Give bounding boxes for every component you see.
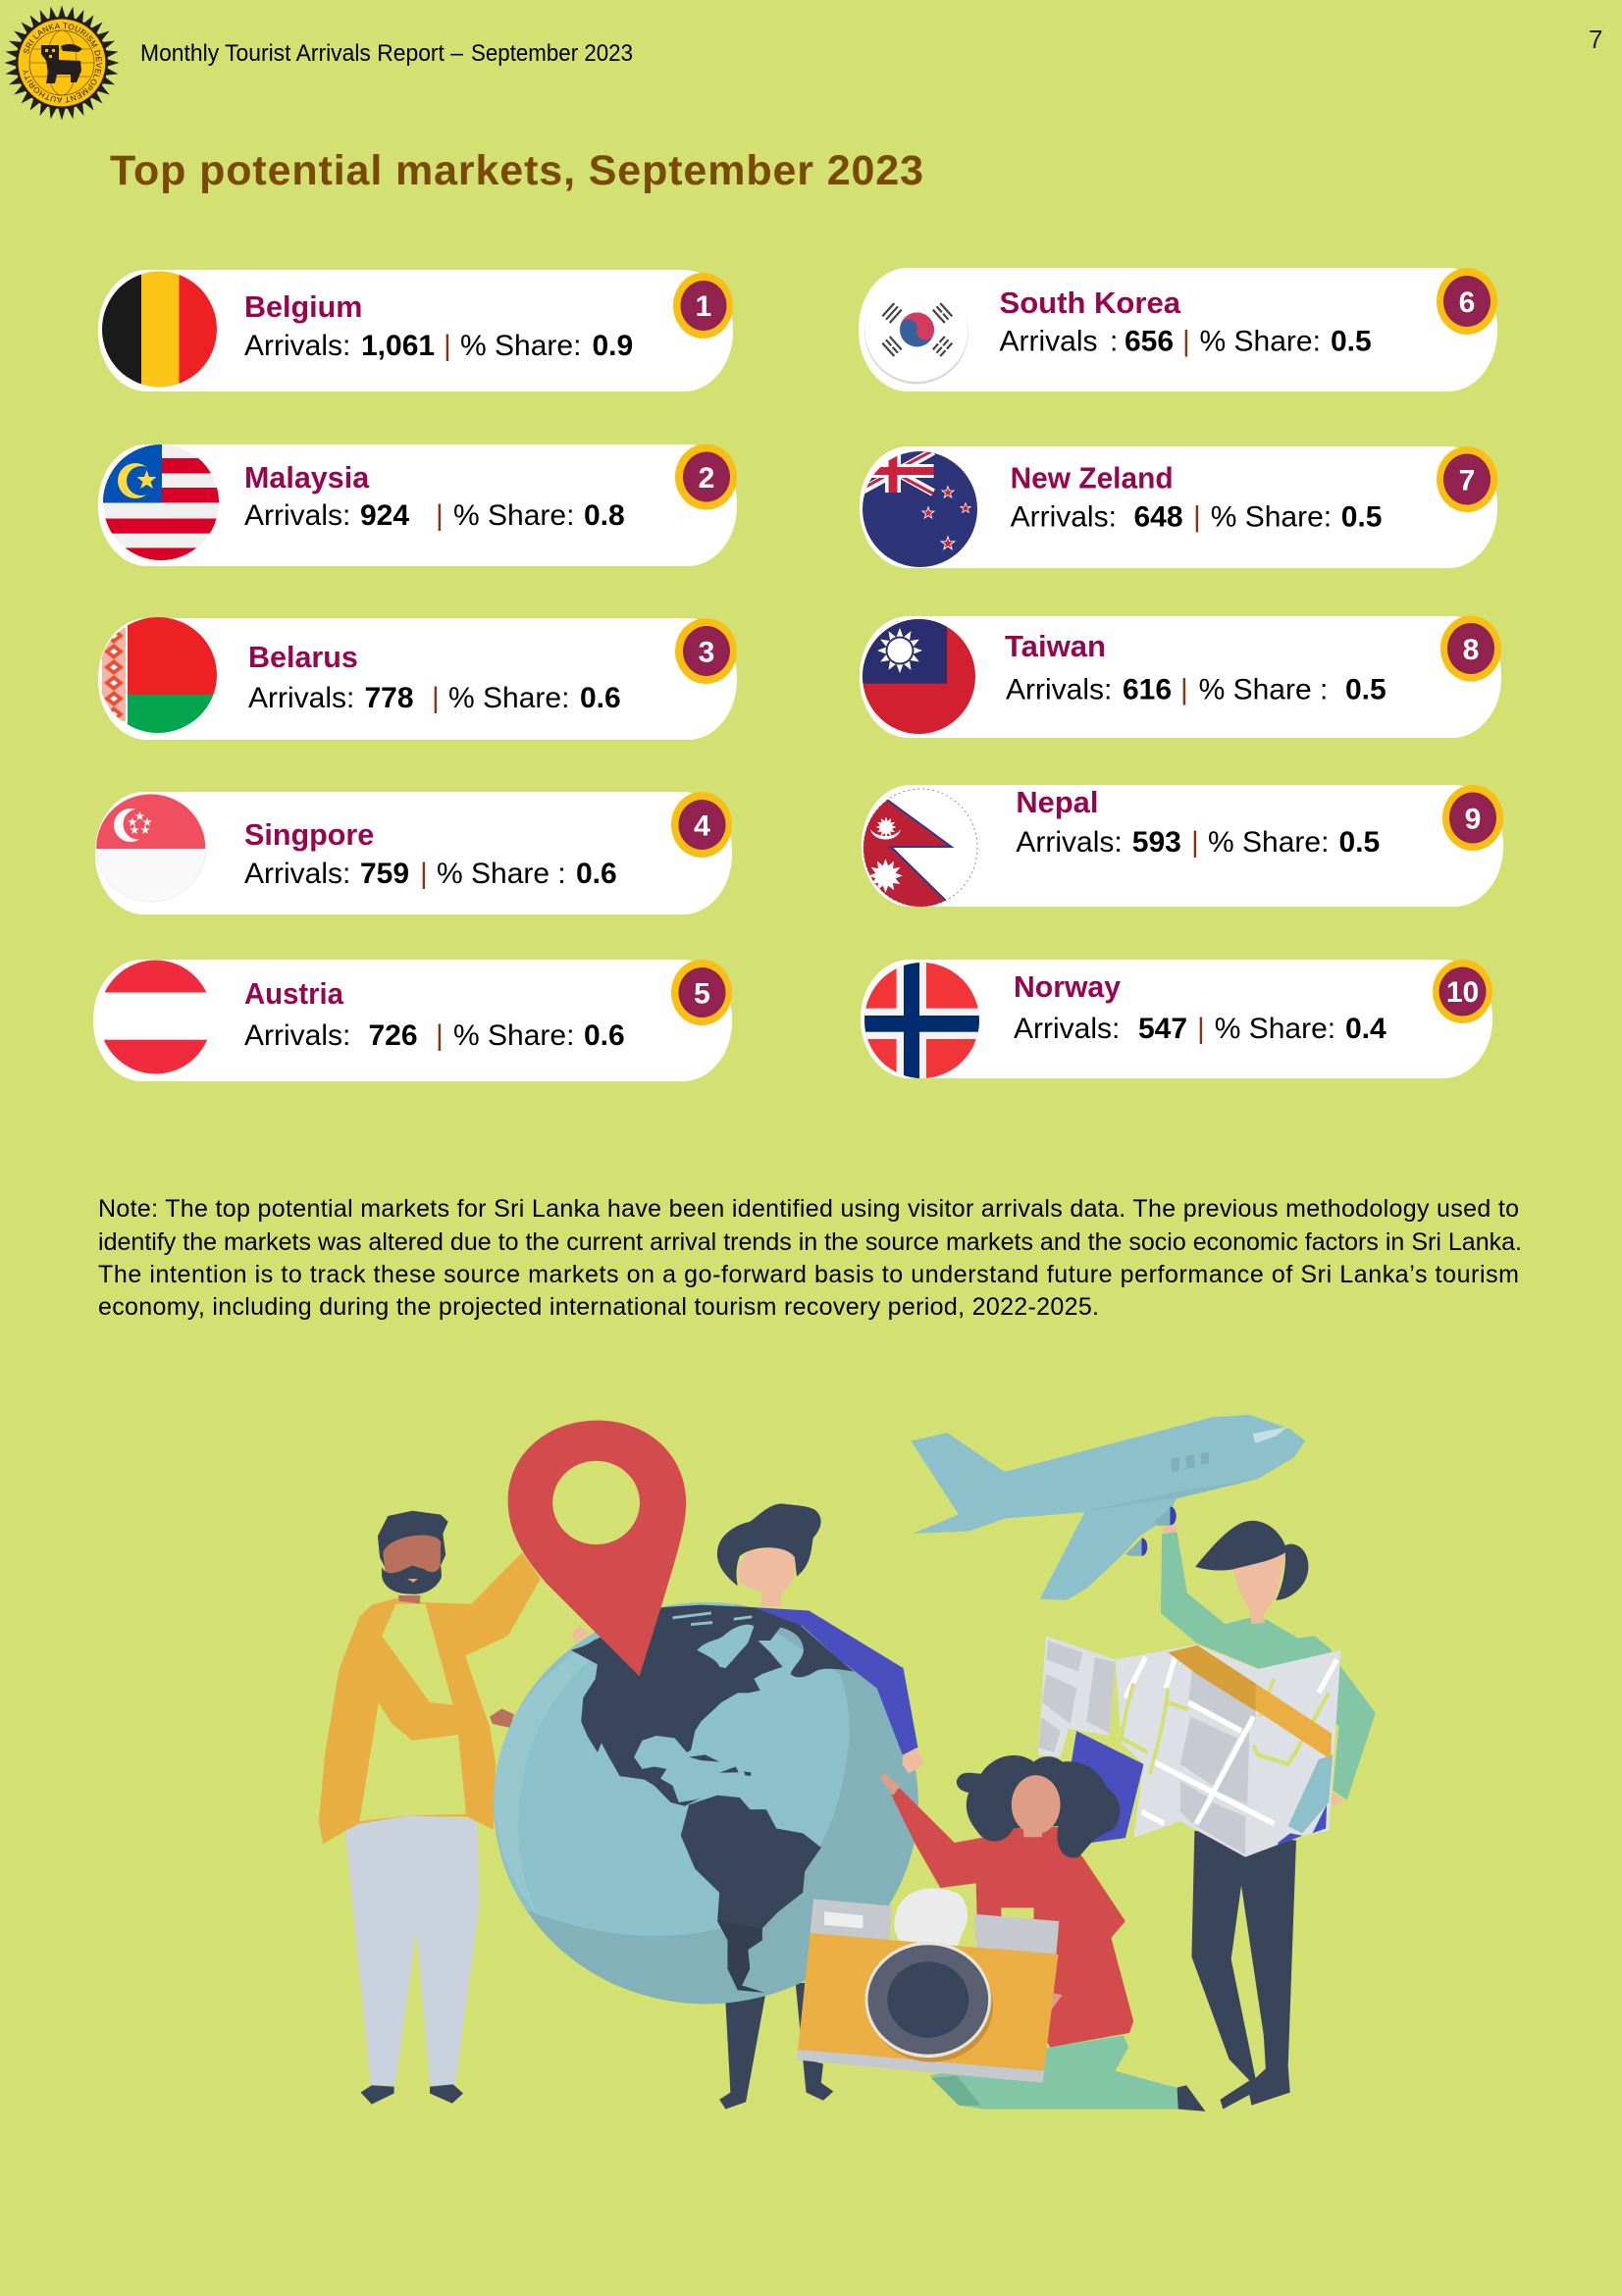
stats: 1,061 bbox=[361, 330, 435, 362]
icon: Taiwan flag bbox=[863, 619, 975, 734]
country name: Belarus bbox=[248, 641, 358, 674]
rank badge: 9 bbox=[1465, 803, 1481, 836]
globe bbox=[494, 1602, 918, 2004]
stats: Arrivals: bbox=[1016, 826, 1123, 859]
man in yellow jacket bbox=[319, 1511, 541, 2105]
panel: Belarus card bbox=[98, 613, 737, 740]
plane bbox=[911, 1415, 1305, 1600]
stats: | bbox=[444, 330, 451, 362]
stats: % Share: bbox=[453, 1019, 574, 1052]
stats: | bbox=[436, 499, 444, 532]
rank badge bbox=[673, 273, 733, 339]
country name: New Zeland bbox=[1011, 461, 1174, 495]
rank badge bbox=[671, 960, 732, 1025]
panel: Nepal card bbox=[862, 785, 1503, 907]
rank badge: 10 bbox=[1446, 976, 1479, 1009]
stats: 0.6 bbox=[580, 682, 621, 714]
stats: | bbox=[432, 682, 440, 714]
icon: Nepal flag bbox=[863, 789, 977, 907]
stats: Arrivals: bbox=[244, 330, 350, 362]
rank badge: 3 bbox=[699, 636, 714, 669]
rank badge: 1 bbox=[696, 290, 711, 323]
panel: Austria card bbox=[93, 957, 732, 1081]
rank badge: 4 bbox=[694, 810, 710, 842]
stats: 0.5 bbox=[1338, 826, 1380, 859]
stats: Arrivals: bbox=[244, 1019, 350, 1052]
icon: Sri Lanka Tourism logo bbox=[4, 6, 120, 120]
stats: % Share: bbox=[1211, 500, 1332, 534]
stats: 656 bbox=[1125, 326, 1174, 357]
icon: Norway flag bbox=[864, 963, 979, 1078]
panel: Singapore card bbox=[93, 790, 732, 914]
panel: Belgium card bbox=[98, 265, 733, 392]
stats: % Share: bbox=[1215, 1013, 1335, 1045]
panel: Malaysia card bbox=[98, 442, 737, 566]
stats: 0.9 bbox=[593, 330, 633, 362]
rank badge bbox=[1437, 446, 1497, 512]
panel: Norway card bbox=[861, 960, 1492, 1082]
rank badge bbox=[1442, 785, 1503, 851]
note text block: economy, including during the projected international tourism recovery period, 2022-2025. bbox=[98, 1293, 1099, 1321]
stats: 0.6 bbox=[576, 858, 617, 890]
rank badge: 7 bbox=[1459, 465, 1475, 496]
rank badge: 6 bbox=[1459, 287, 1475, 319]
icon: New Zealand flag bbox=[863, 451, 977, 567]
stats: | bbox=[1180, 673, 1188, 706]
stats: Arrivals: bbox=[1014, 1013, 1120, 1045]
rank badge bbox=[1433, 960, 1492, 1023]
note text block: Note: The top potential markets for Sri Lanka have been identified using visitor arrivals data. The previous methodology used to bbox=[98, 1195, 1519, 1223]
stats: 648 bbox=[1134, 500, 1183, 534]
title: Top potential markets, September 2023 bbox=[110, 147, 923, 194]
note text block: identify the markets was altered due to the current arrival trends in the source markets and the socio economic factors in Sri Lanka. bbox=[98, 1228, 1522, 1256]
country name: Nepal bbox=[1016, 786, 1098, 819]
note text block bbox=[98, 1195, 1522, 1321]
icon: Malaysia flag bbox=[103, 444, 219, 560]
second man's blue arm and hand bbox=[754, 1607, 924, 1774]
country name: Malaysia bbox=[244, 461, 370, 495]
icon: Sri Lanka Tourism logo: SRI LANKA TOURISM DEVELOPMENT AUTHORITY bbox=[23, 23, 102, 103]
stats: 726 bbox=[369, 1019, 418, 1052]
stats: % Share: bbox=[1199, 326, 1321, 357]
rank badge bbox=[675, 618, 737, 684]
second man behind globe, legs and head bbox=[572, 1503, 833, 2109]
stats: | bbox=[1182, 326, 1190, 357]
icon: Austria flag bbox=[104, 960, 208, 1073]
stats: % Share : bbox=[1199, 673, 1328, 706]
folded map bbox=[1038, 1636, 1341, 1857]
stats: | bbox=[436, 1019, 444, 1052]
rank badge: 8 bbox=[1463, 634, 1479, 666]
stats: Arrivals: bbox=[248, 682, 354, 714]
stats: Arrivals: bbox=[1006, 673, 1112, 706]
rank badge bbox=[1437, 268, 1497, 335]
stats: 0.5 bbox=[1345, 673, 1387, 706]
stats: % Share: bbox=[460, 330, 581, 362]
stats: 0.5 bbox=[1341, 500, 1382, 534]
kneeling woman bbox=[879, 1755, 1206, 2112]
stats: 616 bbox=[1123, 673, 1172, 706]
rank badge: 2 bbox=[699, 462, 714, 495]
header report title bbox=[140, 40, 633, 67]
stats: % Share: bbox=[448, 682, 569, 714]
stats: 0.6 bbox=[584, 1019, 625, 1052]
rank badge bbox=[1440, 616, 1501, 681]
stats: 0.5 bbox=[1331, 326, 1372, 357]
icon: South Korea flag bbox=[864, 279, 968, 385]
icon: Belgium flag bbox=[102, 271, 217, 387]
icon: Singapore flag bbox=[95, 793, 206, 903]
country name: Belgium bbox=[244, 290, 362, 324]
country name: Austria bbox=[244, 977, 344, 1011]
panel: New Zeland card bbox=[859, 446, 1497, 569]
note text block: The intention is to track these source markets on a go-forward basis to understand future performance of Sri Lanka’s tourism bbox=[98, 1261, 1519, 1288]
stats: | bbox=[1191, 826, 1199, 859]
rank badge bbox=[671, 792, 732, 858]
panel: South Korea card bbox=[859, 268, 1497, 391]
icon: Belarus flag bbox=[98, 613, 221, 736]
continents bbox=[571, 1605, 854, 1806]
stats: 759 bbox=[360, 858, 409, 890]
stats: | bbox=[1193, 500, 1201, 534]
stats: Arrivals: bbox=[244, 499, 350, 532]
country name: Norway bbox=[1014, 970, 1121, 1004]
stats: 547 bbox=[1138, 1013, 1187, 1045]
stats: Arrivals bbox=[999, 326, 1098, 357]
stats: 0.4 bbox=[1345, 1013, 1387, 1045]
rank badge bbox=[675, 444, 737, 510]
country name: Singpore bbox=[244, 818, 374, 852]
stats: % Share: bbox=[453, 499, 574, 532]
blue backing of map bbox=[1063, 1731, 1144, 1843]
stats: Arrivals: bbox=[1011, 500, 1117, 534]
stats: 778 bbox=[365, 682, 414, 714]
stats: 0.8 bbox=[584, 499, 625, 532]
stats: : bbox=[1110, 326, 1118, 357]
stats: % Share : bbox=[437, 858, 566, 890]
header report title: September 2023 bbox=[471, 40, 633, 67]
location pin bbox=[508, 1421, 686, 1676]
rank badge: 5 bbox=[694, 977, 710, 1011]
stats: | bbox=[1197, 1013, 1205, 1045]
page number: 7 bbox=[1589, 25, 1602, 54]
stats: 924 bbox=[360, 499, 409, 532]
stats: Arrivals: bbox=[244, 858, 350, 890]
illustration: travellers around the globe bbox=[319, 1415, 1376, 2112]
camera bbox=[797, 1888, 1059, 2083]
country name: Taiwan bbox=[1005, 630, 1106, 663]
country name: South Korea bbox=[999, 287, 1181, 320]
stats: | bbox=[420, 858, 428, 890]
stats: 593 bbox=[1132, 826, 1181, 859]
stats: % Share: bbox=[1208, 826, 1329, 859]
panel: Taiwan card bbox=[859, 616, 1501, 739]
woman with map bbox=[1038, 1521, 1376, 2109]
header report title: Monthly Tourist Arrivals Report – bbox=[140, 40, 464, 67]
